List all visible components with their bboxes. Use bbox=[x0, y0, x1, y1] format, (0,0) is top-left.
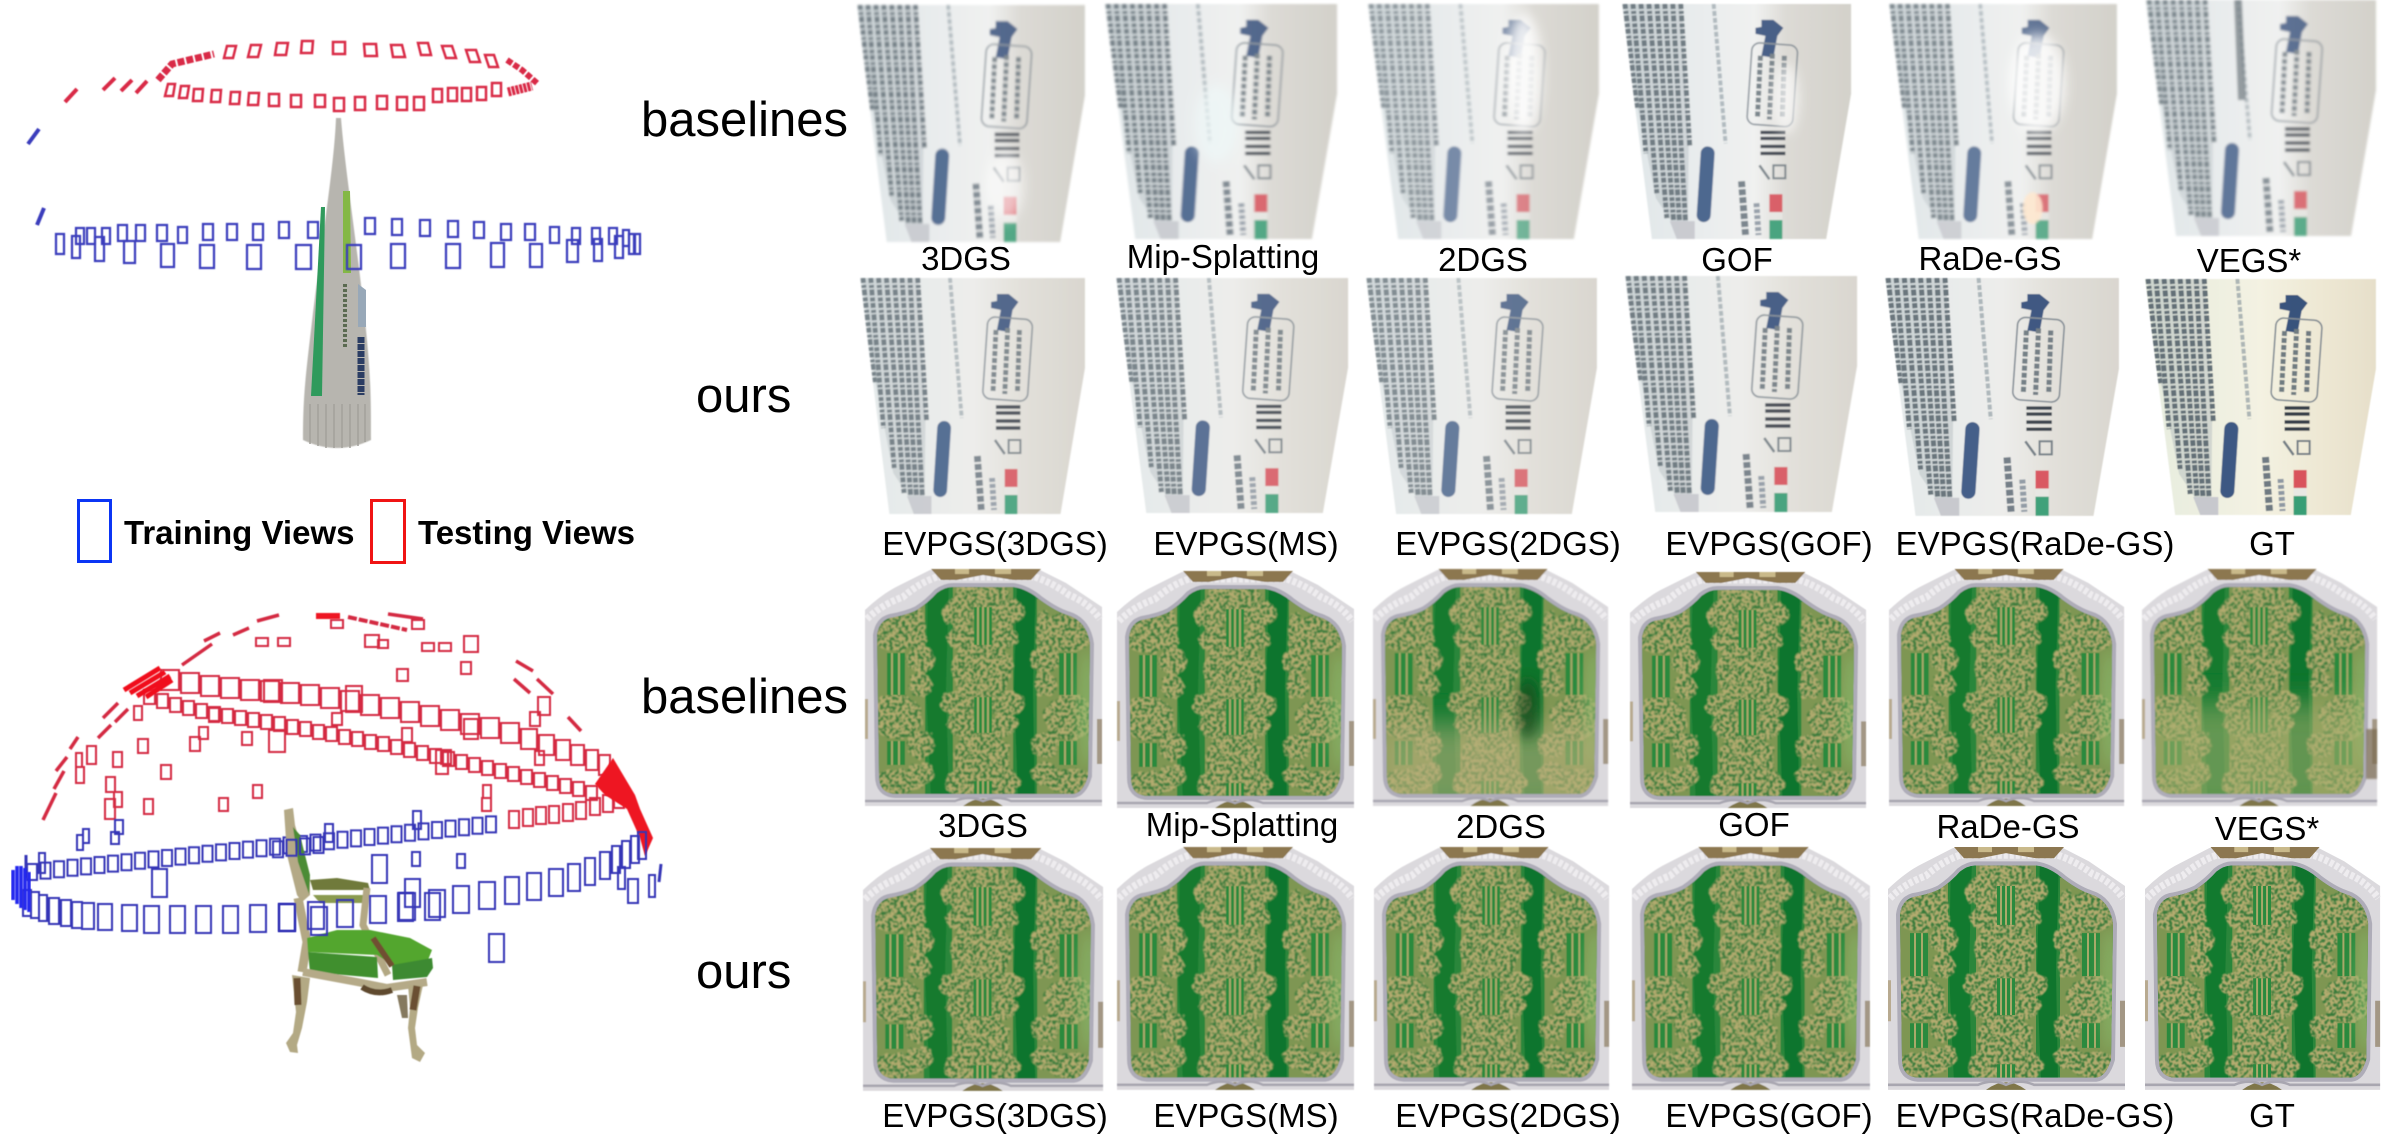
caption: EVPGS(2DGS): EVPGS(2DGS) bbox=[1395, 1097, 1621, 1134]
legend bbox=[78, 500, 635, 562]
chair render: GT bbox=[2145, 847, 2380, 1090]
chair render: EVPGS(RaDe-GS) bbox=[1888, 847, 2125, 1090]
caption: GOF: GOF bbox=[1718, 806, 1790, 843]
caption: EVPGS(GOF): EVPGS(GOF) bbox=[1665, 525, 1873, 562]
tube render: EVPGS(2DGS) bbox=[1366, 278, 1597, 514]
caption: RaDe-GS: RaDe-GS bbox=[1936, 808, 2080, 845]
caption: EVPGS(3DGS): EVPGS(3DGS) bbox=[882, 525, 1108, 562]
red testing camera views around chair bbox=[43, 614, 624, 828]
tube render: 2DGS bbox=[1368, 4, 1599, 239]
caption: EVPGS(RaDe-GS): EVPGS(RaDe-GS) bbox=[1896, 525, 2174, 562]
legend: training views label: Training Views bbox=[124, 514, 354, 551]
caption: EVPGS(2DGS): EVPGS(2DGS) bbox=[1395, 525, 1621, 562]
tube render: VEGS* bbox=[2146, 0, 2376, 236]
chair render: EVPGS(GOF) bbox=[1632, 847, 1870, 1090]
row label: ours tube: ours bbox=[696, 369, 791, 423]
tube render: EVPGS(3DGS) bbox=[860, 278, 1085, 514]
tube 3D model bbox=[303, 118, 371, 448]
caption: VEGS*: VEGS* bbox=[2215, 810, 2319, 847]
blue camera views in front of chair bbox=[273, 824, 504, 962]
caption: VEGS*: VEGS* bbox=[2197, 242, 2301, 279]
caption: EVPGS(MS): EVPGS(MS) bbox=[1153, 1097, 1339, 1134]
row label: ours chair: ours bbox=[696, 945, 791, 999]
chair render: VEGS* bbox=[2142, 569, 2377, 814]
caption: GOF: GOF bbox=[1701, 241, 1773, 278]
caption: 3DGS: 3DGS bbox=[921, 240, 1011, 277]
caption: 2DGS: 2DGS bbox=[1438, 241, 1528, 278]
dense red camera clusters bbox=[124, 613, 653, 856]
row label: baselines chair: baselines bbox=[641, 670, 848, 724]
caption: GT: GT bbox=[2249, 1097, 2295, 1134]
caption: Mip-Splatting: Mip-Splatting bbox=[1127, 238, 1319, 275]
caption: RaDe-GS: RaDe-GS bbox=[1918, 240, 2062, 277]
tube render: EVPGS(RaDe-GS) bbox=[1885, 278, 2119, 516]
tube render: EVPGS(GOF) bbox=[1625, 276, 1857, 512]
chair render: Mip-Splatting bbox=[1117, 571, 1354, 808]
legend: training views swatch bbox=[78, 500, 110, 562]
caption: 3DGS: 3DGS bbox=[938, 807, 1028, 844]
tube render: 3DGS bbox=[857, 5, 1085, 242]
chair render: EVPGS(MS) bbox=[1117, 847, 1354, 1090]
tube render: GT bbox=[2145, 279, 2376, 515]
tube render: RaDe-GS bbox=[1889, 4, 2117, 239]
chair 3D model bbox=[284, 808, 433, 1062]
caption: 2DGS: 2DGS bbox=[1456, 808, 1546, 845]
chair render: RaDe-GS bbox=[1889, 569, 2124, 806]
blue training camera views around tube bbox=[28, 129, 640, 269]
chair render: 3DGS bbox=[865, 569, 1102, 806]
tube render: GOF bbox=[1622, 4, 1851, 239]
dense blue camera cluster bbox=[13, 866, 29, 912]
blue training camera views around chair bbox=[23, 811, 661, 933]
caption: EVPGS(GOF): EVPGS(GOF) bbox=[1665, 1097, 1873, 1134]
chair render: EVPGS(2DGS) bbox=[1374, 847, 1609, 1090]
caption: GT: GT bbox=[2249, 525, 2295, 562]
panel: toothpaste tube camera layout bbox=[28, 41, 640, 448]
caption: EVPGS(MS): EVPGS(MS) bbox=[1153, 525, 1339, 562]
row label: baselines tube: baselines bbox=[641, 93, 848, 147]
legend: testing views swatch bbox=[372, 500, 404, 562]
chair render: EVPGS(3DGS) bbox=[863, 848, 1103, 1091]
caption: EVPGS(RaDe-GS): EVPGS(RaDe-GS) bbox=[1896, 1097, 2174, 1134]
tube render: EVPGS(MS) bbox=[1116, 278, 1348, 513]
chair render: GOF bbox=[1630, 572, 1866, 808]
tube render: Mip-Splatting bbox=[1105, 4, 1337, 239]
chair render: 2DGS bbox=[1373, 569, 1608, 814]
red testing camera views around tube bbox=[65, 41, 538, 111]
legend: testing views label: Testing Views bbox=[418, 514, 635, 551]
caption: Mip-Splatting: Mip-Splatting bbox=[1146, 806, 1338, 843]
caption: EVPGS(3DGS): EVPGS(3DGS) bbox=[882, 1097, 1108, 1134]
panel: chair camera layout bbox=[13, 613, 661, 1062]
